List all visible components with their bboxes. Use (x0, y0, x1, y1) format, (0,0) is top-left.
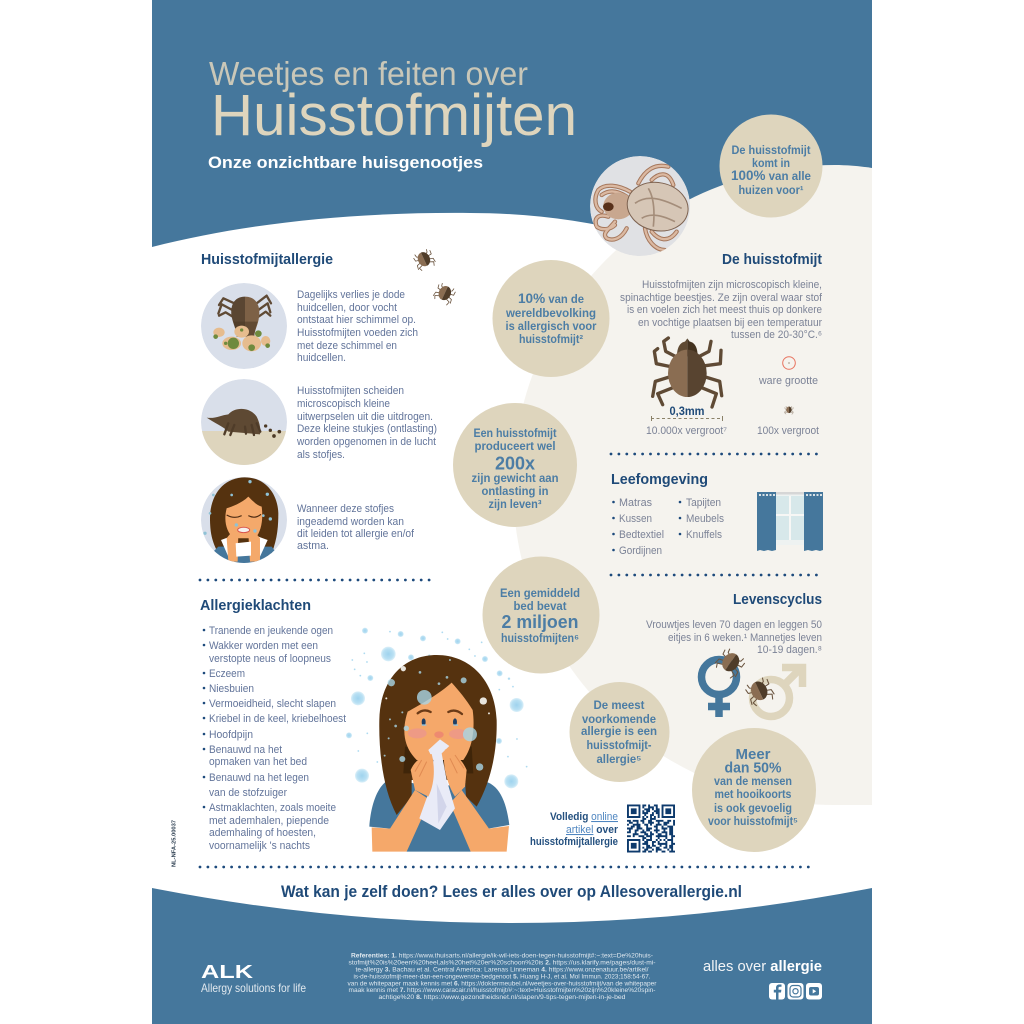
text: step 1: huidcellen, door vocht (297, 302, 397, 314)
social icons (769, 983, 822, 1000)
callout: 200x: ontlasting in (482, 485, 548, 498)
list: habitats: Meubels (686, 513, 724, 525)
list: habitats: Kussen (619, 513, 652, 525)
callout: meer dan 50%: is ook gevoelig (714, 802, 792, 815)
shirt (369, 780, 509, 852)
text: mite description: tussen de 20-30°C.⁶ (731, 329, 822, 341)
text: life cycle: 10-19 dagen.⁸ (757, 644, 822, 656)
list: habitats: Gordijnen (619, 545, 662, 557)
link to article (530, 811, 618, 848)
callout: 200x: zijn leven³ (488, 498, 542, 511)
text: life cycle: Vrouwtjes leven 70 dagen en leggen 50 (646, 619, 822, 631)
list: symptoms: Astmaklachten, zoals moeite (209, 802, 336, 814)
text: step 2: als stofjes. (297, 449, 345, 461)
icon: small mite 2 (432, 282, 456, 306)
icon: youtube (806, 983, 822, 1000)
heading: Huisstofmijtallergie: Huisstofmijtallergie (201, 251, 333, 268)
references: van de whitepaper maak kennis met 6. https://doktermeubel.nl/weetjes-over-huisstofmijt/van de whitepaper (348, 980, 657, 988)
callout: meest voorkomende allergie: allergie⁵ (596, 753, 642, 766)
title line 1: Weetjes en feiten over (209, 55, 528, 92)
text: step 1: Huisstofmijten voeden zich (297, 327, 418, 339)
title block (208, 55, 577, 172)
text: step 1 (297, 289, 418, 364)
references: Referenties: 1. https://www.thuisarts.nl/allergie/ik-wil-iets-doen-tegen-huisstofmijt#:~:text=De%20huis- (351, 952, 653, 960)
woman figure (369, 655, 509, 852)
footer band (152, 888, 872, 1024)
callout: meer dan 50%: met hooikoorts (714, 788, 792, 801)
list: habitats (612, 497, 724, 557)
references: is-de-huisstofmijt-meer-dan-een-ongewenste-bedgenoot 5. Huang H-J, et al. Mol Immun. 2023;158:54-67. (354, 974, 651, 980)
text: mite description: spinachtige beestjes. Ze zijn overal waar stof (620, 292, 822, 304)
icon: small mite 1 (412, 248, 437, 272)
text: step 2: Deze kleine stukjes (ontlasting) (297, 423, 437, 435)
callout: 10%: huisstofmijt² (519, 333, 583, 346)
callout: 200x: produceert wel (474, 440, 556, 453)
scale: 0,3mm (651, 406, 723, 421)
arms (372, 790, 430, 852)
callout: 200x: 200x (495, 452, 536, 474)
icon: mite on female symbol (713, 647, 747, 680)
heading: Leefomgeving: Leefomgeving (611, 471, 708, 488)
callout: meest voorkomende allergie: De meest (594, 699, 645, 712)
callout: 100%: komt in (752, 157, 790, 170)
callout: meer dan 50%: voor huisstofmijt⁵ (708, 815, 798, 828)
text: step 2 (296, 385, 437, 461)
link to article: huisstofmijtallergie (530, 836, 618, 848)
list: symptoms: opmaken van het bed (209, 756, 307, 768)
list: symptoms: met ademhalen, piepende (209, 815, 329, 827)
callout: 100% (720, 114, 822, 218)
text: life cycle (646, 619, 822, 656)
text: step 3: dit leiden tot allergie en/of (297, 528, 414, 540)
brand: alles over allergie: alles over allergie (703, 958, 822, 975)
scale: 0,3mm: 0,3mm (670, 406, 704, 418)
text: step 3: ingeademd worden kan (297, 516, 404, 528)
list: symptoms: voornamelijk 's nachts (209, 840, 310, 852)
hair (379, 655, 497, 815)
callout: 10%: wereldbevolking (505, 307, 596, 320)
callout: meer dan 50%: van de mensen (714, 775, 792, 788)
label: 100x vergroot: 100x vergroot (757, 425, 819, 437)
illustration: woman inhaling dust (201, 477, 287, 565)
icon: facebook (769, 983, 785, 1000)
list: symptoms: Tranende en jeukende ogen (209, 625, 333, 637)
callout: 100%: De huisstofmijt (732, 144, 811, 157)
illustration: mite droppings (200, 379, 290, 467)
callout: 2 miljoen: huisstofmijten⁶ (501, 632, 579, 645)
ALK logo (201, 961, 306, 995)
QR code (627, 805, 677, 852)
icon: true size marker (783, 357, 795, 369)
callout: 10%: 10% van de (518, 290, 585, 306)
list: symptoms: Kriebel in de keel, kriebelhoest (209, 713, 346, 725)
face (404, 683, 474, 760)
list: symptoms: Benauwd na het legen (209, 772, 309, 784)
text: step 1: met deze schimmel en (297, 340, 397, 352)
photo of dust mite (590, 156, 693, 256)
callout: 2 miljoen: bed bevat (514, 600, 567, 613)
text: life cycle: eitjes in 6 weken.¹ Mannetjes leven (668, 632, 822, 644)
text: step 2: Huisstofmijten scheiden (297, 385, 404, 397)
callout: 10%: is allergisch voor (506, 320, 597, 333)
list: symptoms: ademhaling of hoesten, (209, 827, 316, 839)
label: 10.000x vergroot: 10.000x vergroot⁷ (646, 425, 727, 437)
references: te-allergy 3. Bachau et al. Central America: Larenas Linneman 4. https://www.onzenatuur.be/artikel/ (356, 966, 649, 974)
callout: 10% (492, 260, 610, 377)
ALK logo: ALK (201, 961, 254, 982)
references: achtige%20 8. https://www.gezondheidsnet.nl/slapen/9-tips-tegen-mijten-in-je-bed (378, 994, 626, 1001)
callout: 100%: huizen voor¹ (738, 184, 804, 197)
text: step 1: ontstaat hier schimmel op. (297, 314, 416, 326)
dust particles (346, 628, 528, 788)
callout: meest voorkomende allergie: allergie is een (581, 725, 657, 738)
text: step 2: worden opgenomen in de lucht (296, 436, 436, 448)
list: symptoms: Hoofdpijn (209, 729, 253, 741)
particles over hair (384, 659, 490, 771)
tissue (419, 739, 455, 830)
list: habitats: Tapijten (686, 497, 721, 509)
callout: meest voorkomende allergie (570, 682, 670, 782)
callout: 100%: 100% van alle (731, 168, 812, 183)
icon: male symbol (752, 667, 802, 716)
callout: meest voorkomende allergie: huisstofmijt- (586, 739, 652, 752)
list: symptoms: Wakker worden met een (209, 640, 318, 652)
callout: meest voorkomende allergie: voorkomende (582, 713, 657, 726)
icon: mite on male symbol (744, 676, 776, 708)
icon: instagram (788, 983, 804, 1000)
callout: meer dan 50% (692, 728, 816, 852)
call to action: Wat kan je zelf doen? Lees er alles over op Allesoverallergie.nl (281, 882, 742, 901)
references (348, 952, 657, 1001)
list: symptoms: Vermoeidheid, slecht slapen (209, 698, 336, 710)
heading: Allergieklachten: Allergieklachten (200, 597, 311, 614)
poster background (152, 0, 872, 1024)
link to article: Volledig online (550, 811, 618, 823)
text: step 1: huidcellen. (297, 352, 346, 364)
text: mite description: is en voelen zich het meest thuis op donkere (627, 304, 822, 316)
text: step 3: Wanneer deze stofjes (297, 503, 394, 515)
text: step 2: microscopisch kleine (297, 398, 390, 410)
text: mite description: Huisstofmijten zijn microscopisch kleine, (642, 279, 822, 291)
text: mite description: en vochtige plaatsen bij een temperatuur (638, 317, 822, 329)
icon: window with curtains (757, 492, 823, 551)
text: step 3: astma. (297, 540, 329, 552)
callout: 2 miljoen (482, 556, 600, 674)
label: ware grootte: ware grootte (758, 375, 818, 387)
text: step 1: Dagelijks verlies je dode (297, 289, 405, 301)
text: mite description (620, 279, 822, 341)
icon: tiny mite (785, 406, 793, 414)
link to article: artikel over (566, 824, 618, 836)
list: symptoms: Eczeem (209, 668, 245, 680)
callout: 200x (453, 403, 577, 527)
references: maak kennis met 7. https://www.caracair.nl/huisstofmijt/#:~:text=Huisstofmijten%20zijn%20kleine%20spin- (348, 987, 656, 994)
subtitle: Onze onzichtbare huisgenootjes (208, 153, 483, 172)
hands (411, 754, 434, 797)
list: symptoms: van de stofzuiger (209, 787, 287, 799)
heading: De huisstofmijt: De huisstofmijt (722, 251, 822, 268)
list: habitats: Matras (619, 497, 652, 509)
icon: large mite (653, 338, 722, 407)
list: habitats: Knuffels (686, 529, 722, 541)
list: symptoms: verstopte neus of loopneus (209, 653, 331, 665)
callout: 200x: Een huisstofmijt (474, 427, 557, 440)
heading: Levenscyclus: Levenscyclus (733, 591, 822, 608)
callout: meer dan 50%: Meer (736, 747, 771, 763)
icon: female symbol (702, 660, 736, 717)
callout: 2 miljoen: Een gemiddeld (500, 587, 580, 600)
references: stofmijt%20is%20een%20heel,als%20het%20er%20schoon%20is 2. https://us.klarify.me/pages/dust-mi- (348, 960, 656, 966)
ALK tagline: Allergy solutions for life (201, 981, 306, 995)
document code: NL-NFA-25.00037 (172, 820, 178, 867)
list: symptoms (203, 625, 346, 852)
list: symptoms: Niesbuien (209, 683, 254, 695)
text: step 2: uitwerpselen uit die uitdrogen. (297, 411, 433, 423)
text: step 3 (297, 503, 414, 552)
callout: 200x: zijn gewicht aan (472, 472, 558, 485)
illustration: sneezing woman with dust particles (346, 628, 528, 852)
list: habitats: Bedtextiel (619, 529, 664, 541)
callout: 2 miljoen: 2 miljoen (502, 612, 578, 632)
list: symptoms: Benauwd na het (209, 744, 282, 756)
callout: meer dan 50%: dan 50% (724, 760, 782, 776)
illustration: mite eating skin flakes (201, 283, 287, 369)
title line 2: Huisstofmijten (211, 83, 577, 148)
